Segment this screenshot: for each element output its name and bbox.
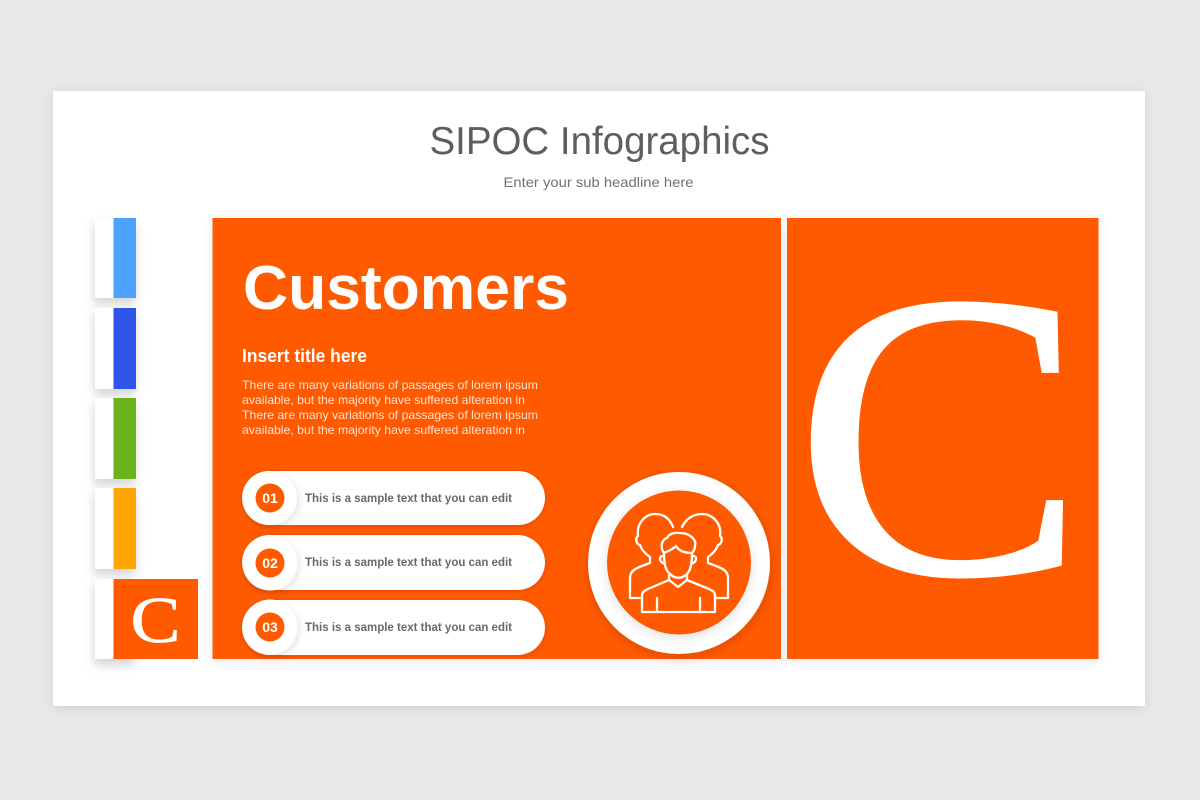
body text: There are many variations of passages of lorem ipsum (242, 408, 538, 422)
panel title: Insert title here (242, 346, 367, 366)
tab: I dark blue (95, 308, 136, 389)
list item 03: This is a sample text that you can edit (305, 620, 512, 634)
tab: S blue (95, 218, 136, 298)
list item 01: This is a sample text that you can edit (305, 491, 512, 505)
heading: Customers: Customers (243, 254, 569, 323)
body text (242, 378, 538, 437)
background card (53, 91, 1145, 706)
body text: available, but the majority have suffered alteration in (242, 393, 525, 407)
title: SIPOC Infographics (430, 120, 770, 163)
tab: C active orange: C (130, 584, 180, 657)
body text: available, but the majority have suffered alteration in (242, 423, 525, 437)
body text: There are many variations of passages of lorem ipsum (242, 378, 538, 392)
subtitle: Enter your sub headline here (504, 174, 694, 190)
list item 03: 03 (262, 619, 278, 635)
icon: customers group (630, 514, 728, 612)
panel: customers (212, 218, 781, 659)
tab: P green (95, 398, 136, 479)
list item 02: This is a sample text that you can edit (305, 555, 512, 569)
list item 01 (242, 471, 545, 525)
list item 02 (242, 535, 545, 590)
badge ring (588, 472, 770, 654)
panel: big letter C: C (794, 210, 1086, 662)
list item 01: 01 (262, 490, 278, 506)
list item 03 (242, 600, 545, 655)
tab: C active orange (95, 579, 198, 659)
list item 02: 02 (262, 555, 278, 571)
tab: O amber (95, 488, 136, 569)
